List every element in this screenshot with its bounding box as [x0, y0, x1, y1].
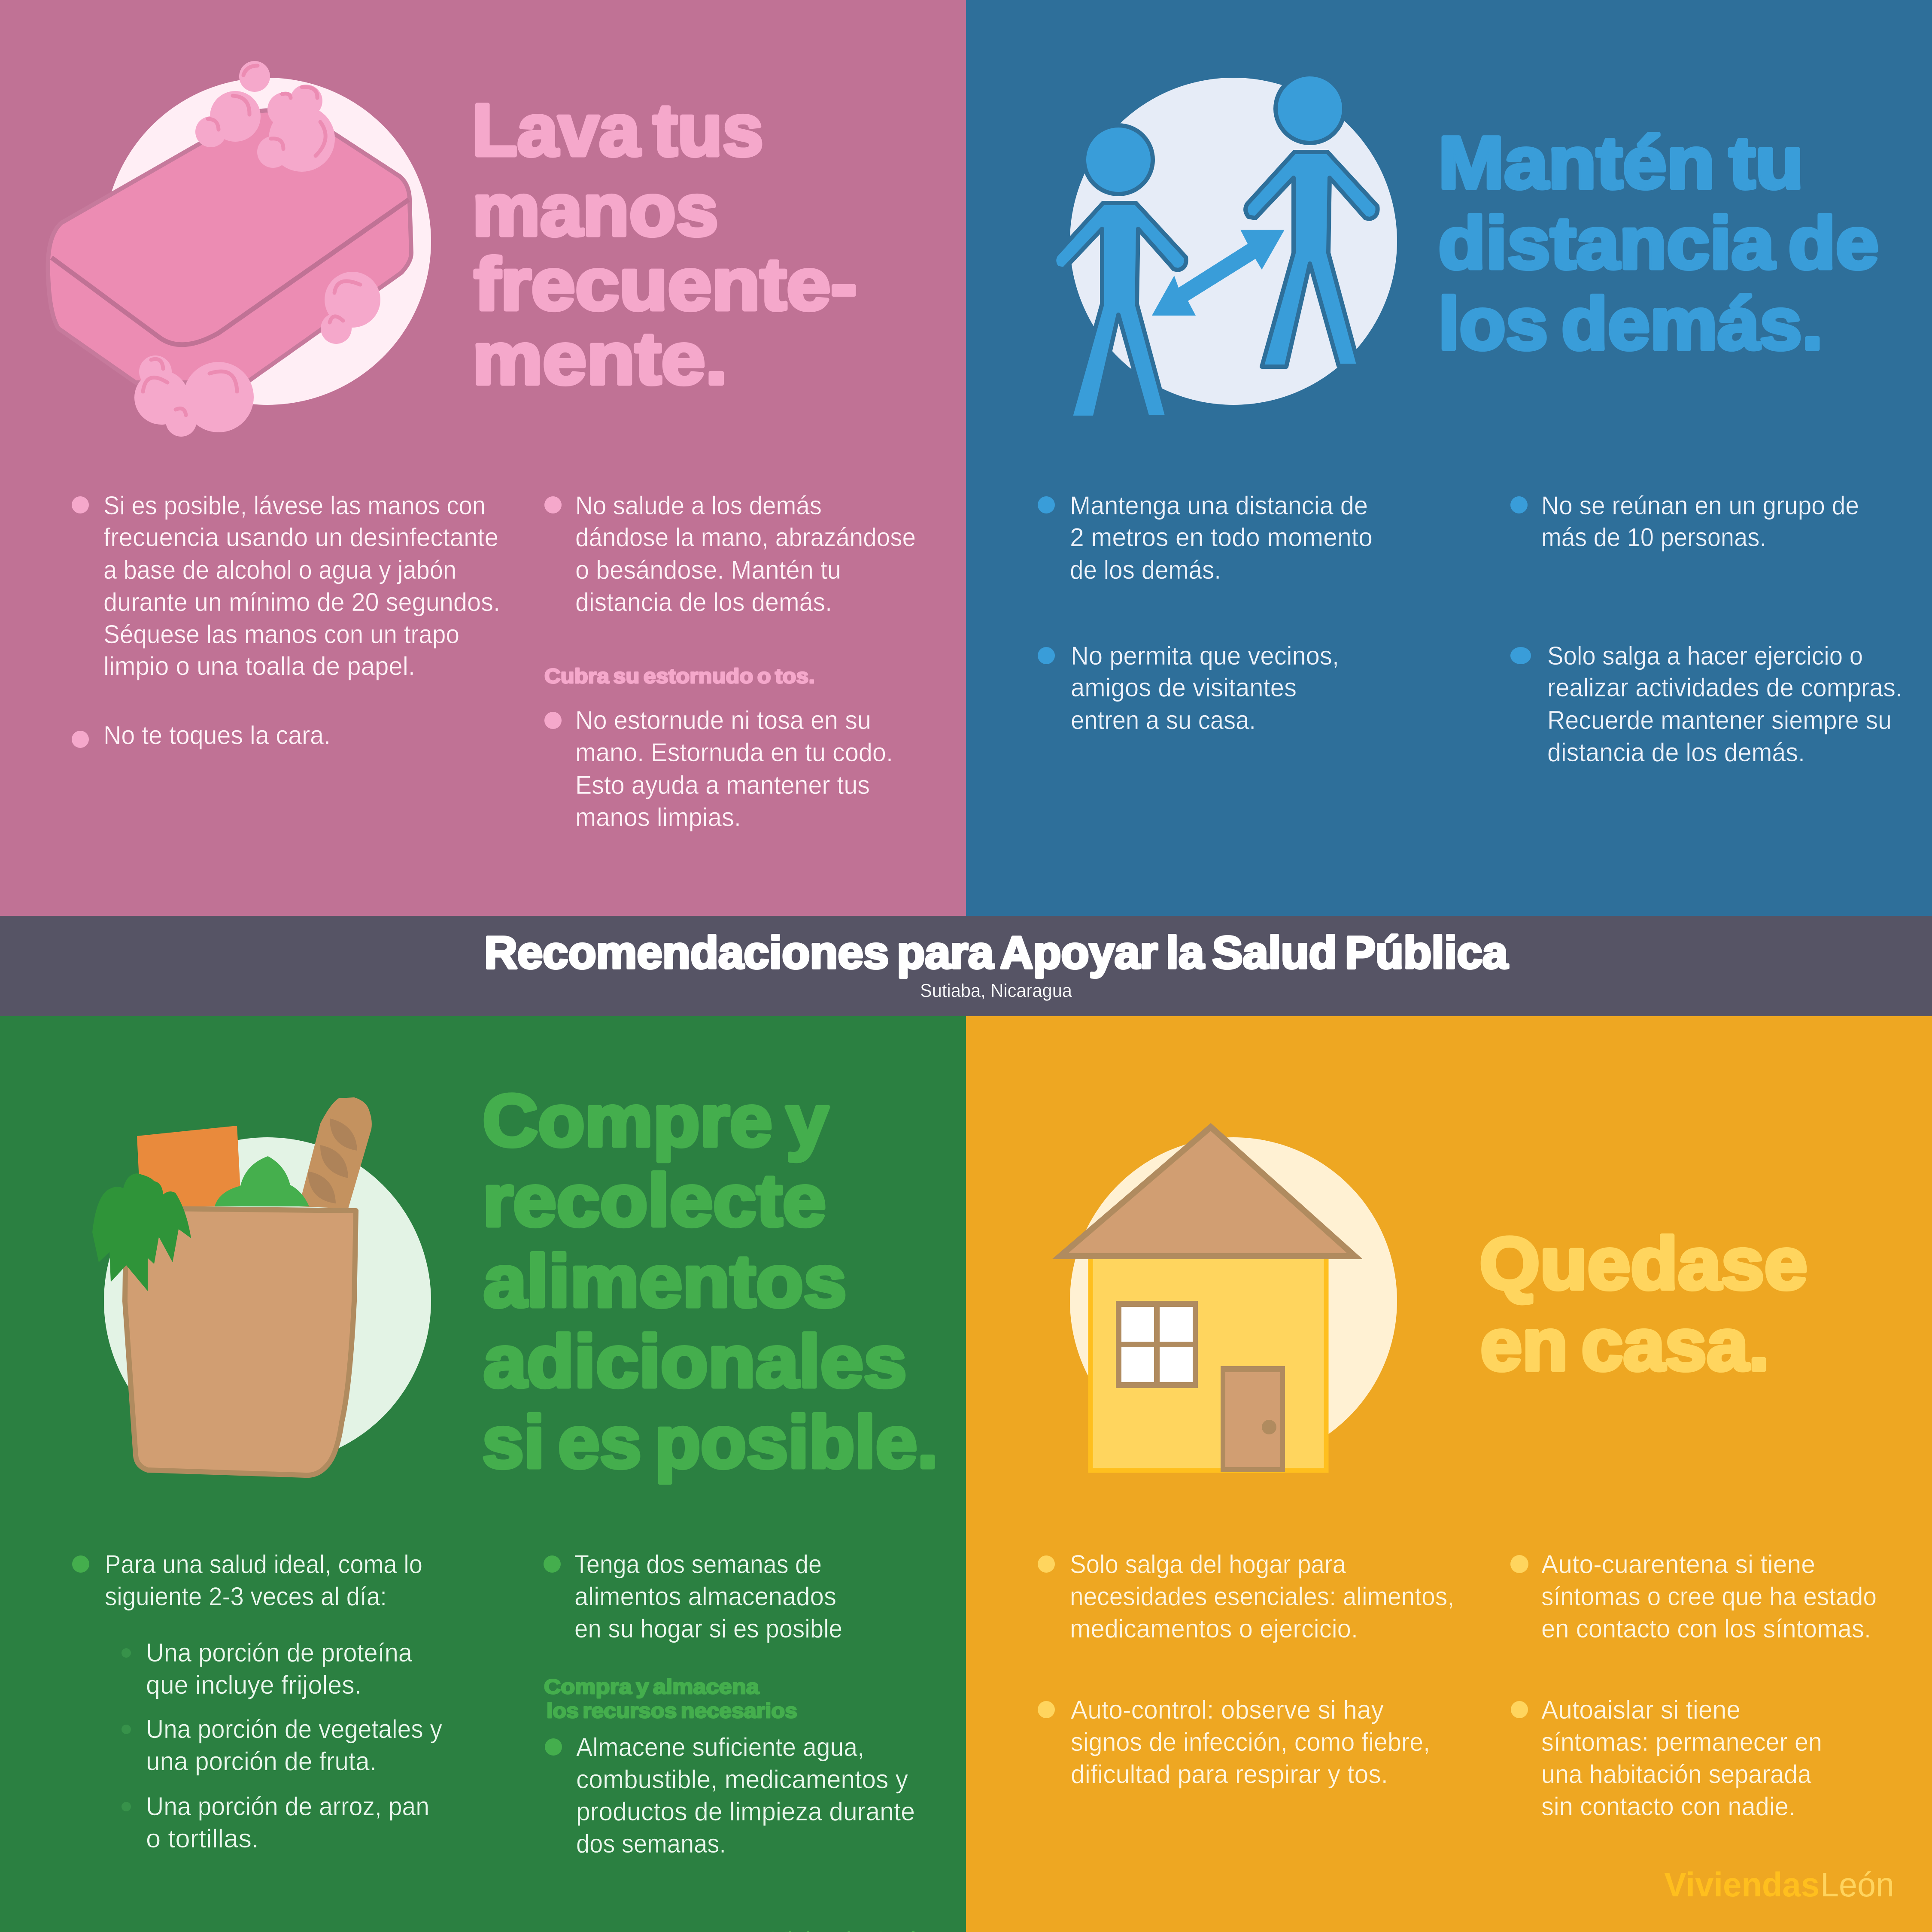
text block: right column: mano. Estornuda en tu codo.	[575, 738, 893, 767]
window	[1116, 1301, 1198, 1388]
text block: right column: dos semanas.	[576, 1829, 726, 1858]
heading: Compre y recolecte alimentos adicionales si es posible: Compre y	[483, 1079, 829, 1162]
panel: wash hands	[0, 0, 966, 916]
panel background: yellow	[966, 1016, 1932, 1932]
heading: Lava tus manos frecuentemente: Lava tus	[472, 89, 763, 171]
text block: left column	[105, 1550, 442, 1853]
text block: right column	[1541, 1550, 1877, 1821]
text block: left column: durante un mínimo de 20 segundos.	[103, 588, 500, 617]
text block: left column: Solo salga del hogar para	[1070, 1550, 1346, 1579]
text block: left column: Auto-control: observe si hay	[1071, 1695, 1384, 1724]
text block: left column: o tortillas.	[146, 1824, 259, 1853]
text block: left column: frecuencia usando un desinfectante	[103, 523, 498, 552]
baguette	[299, 1097, 372, 1209]
text block: right column: alimentos almacenados	[574, 1582, 836, 1611]
bag body	[125, 1208, 356, 1475]
text block: right column: Auto-cuarentena si tiene	[1541, 1550, 1815, 1579]
heading: Lava tus manos frecuentemente: manos	[472, 169, 718, 251]
text block: left column	[103, 491, 500, 750]
subtitle: location: Sutiaba, Nicaragua	[920, 980, 1072, 1001]
heading: Compre y recolecte alimentos adicionales si es posible: si es posible.	[482, 1401, 938, 1483]
subheading: buy and store: los recursos necesarios	[547, 1700, 797, 1722]
subheading: buy and store	[544, 1676, 797, 1722]
text block: left column: necesidades esenciales: alimentos,	[1070, 1582, 1454, 1611]
bullets: blue	[1038, 496, 1531, 664]
logo: ViviendasLeón: Viviendas	[1664, 1865, 1820, 1904]
door	[1221, 1366, 1285, 1472]
subheading: cover sneeze: Cubra su estornudo o tos.	[544, 665, 815, 688]
text block: left column: Séquese las manos con un trapo	[103, 620, 459, 649]
text block: right column: síntomas o cree que ha estado	[1541, 1582, 1877, 1611]
text block: right column: Autoaislar si tiene	[1541, 1695, 1741, 1724]
text block: left column: limpio o una toalla de papel.	[103, 652, 415, 680]
panel: buy food	[0, 1016, 966, 1932]
panel background: green	[0, 1016, 966, 1932]
heading: Compre y recolecte alimentos adicionales si es posible: alimentos	[483, 1240, 847, 1322]
text block: left column	[1070, 1550, 1454, 1789]
text block: left column: que incluye frijoles.	[146, 1671, 361, 1699]
text block: right column: Recuerde mantener siempre su	[1547, 706, 1892, 735]
text block: right column: sin contacto con nadie.	[1541, 1792, 1795, 1821]
text block: left column: medicamentos o ejercicio.	[1070, 1614, 1358, 1643]
bullets: yellow	[1038, 1555, 1528, 1718]
text block: right column: Esto ayuda a mantener tus	[575, 771, 870, 799]
text block: right column: Solo salga a hacer ejercicio o	[1547, 641, 1863, 670]
heading: Mantén tu distancia de los demás	[1438, 122, 1879, 365]
text block: right column: realizar actividades de compras.	[1547, 673, 1902, 702]
text block: left column	[1070, 491, 1373, 735]
heading: Compre y recolecte alimentos adicionales si es posible: adicionales	[483, 1320, 907, 1403]
text block: right column: No se reúnan en un grupo de	[1541, 491, 1859, 520]
heading: Quedase en casa	[1479, 1222, 1807, 1386]
text block: right column: No salude a los demás	[575, 491, 822, 520]
heading: Lava tus manos frecuentemente: frecuente-	[474, 243, 857, 325]
text block: right column: más de 10 personas.	[1541, 523, 1766, 552]
text block: right column: distancia de los demás.	[575, 588, 832, 617]
text block: left column: Para una salud ideal, coma lo	[105, 1550, 422, 1579]
text block: right column: dándose la mano, abrazándose	[575, 523, 916, 552]
main title: Recomendaciones para Apoyar la Salud Pública	[484, 927, 1508, 978]
sub-bullets: dark green	[122, 1648, 131, 1811]
text block: right column: Tenga dos semanas de	[574, 1550, 822, 1579]
dark leaves	[92, 1173, 191, 1291]
text block: right column: combustible, medicamentos y	[576, 1765, 908, 1794]
panel: stay home	[966, 1016, 1932, 1932]
text block: right column: manos limpias.	[575, 803, 741, 832]
panel background: pink	[0, 0, 966, 916]
text block: right column: en contacto con los síntomas.	[1541, 1614, 1871, 1643]
icon: soap bar with bubbles	[48, 61, 431, 437]
text block: right column: productos de limpieza durante	[576, 1797, 915, 1826]
text block: left column: entren a su casa.	[1071, 706, 1256, 735]
carrot-coloured box	[137, 1126, 241, 1206]
text block: left column: Mantenga una distancia de	[1070, 491, 1368, 520]
heading: Lava tus manos frecuentemente	[472, 89, 857, 400]
text block: left column: No te toques la cara.	[103, 721, 331, 750]
panel background: blue	[966, 0, 1932, 916]
subheading: buy and store: Compra y almacena	[544, 1676, 759, 1698]
text block: right column: No estornude ni tosa en su	[575, 706, 871, 735]
text block: right column: en su hogar si es posible	[574, 1614, 842, 1643]
text block: right column: Almacene suficiente agua,	[576, 1733, 864, 1762]
heading: Compre y recolecte alimentos adicionales si es posible: recolecte	[483, 1159, 826, 1242]
heading: Quedase en casa: en casa.	[1480, 1303, 1769, 1386]
icon: grocery bag	[92, 1097, 431, 1475]
heading: Quedase en casa: Quedase	[1479, 1222, 1807, 1305]
text block: right column: síntomas: permanecer en	[1541, 1728, 1822, 1756]
heading: Lava tus manos frecuentemente: mente.	[472, 317, 727, 400]
text block: right column: una habitación separada	[1541, 1760, 1812, 1789]
logo: ViviendasLeón: León	[1820, 1865, 1894, 1904]
text block: left column: No permita que vecinos,	[1071, 641, 1339, 670]
bullets: pink	[72, 496, 562, 748]
text block: left column: dificultad para respirar y tos.	[1071, 1760, 1388, 1789]
text block: left column: amigos de visitantes	[1071, 673, 1297, 702]
text block: left column: 2 metros en todo momento	[1070, 523, 1373, 552]
text block: left column: una porción de fruta.	[146, 1747, 377, 1776]
text block: left column: a base de alcohol o agua y jabón	[103, 556, 456, 584]
heading: Mantén tu distancia de los demás: Mantén tu	[1438, 122, 1804, 204]
heading: Mantén tu distancia de los demás: distancia de	[1438, 202, 1879, 284]
text block: left column: Una porción de proteína	[146, 1638, 413, 1667]
icon: house	[1060, 1127, 1397, 1472]
text block: right column	[1541, 491, 1902, 767]
text block: right column	[575, 491, 916, 832]
heading: Mantén tu distancia de los demás: los demás.	[1438, 283, 1823, 365]
panel: title band	[0, 916, 1932, 1016]
text block: left column: signos de infección, como fiebre,	[1071, 1728, 1430, 1756]
text block: right column: o besándose. Mantén tu	[575, 556, 841, 584]
band background	[0, 916, 1932, 1016]
text block: left column: Si es posible, lávese las manos con	[103, 491, 486, 520]
text block: right column	[574, 1550, 915, 1858]
text block: left column: Una porción de vegetales y	[146, 1715, 442, 1744]
icon: two people with arrow	[1054, 74, 1397, 418]
text block: left column: siguiente 2-3 veces al día:	[105, 1582, 387, 1611]
text block: right column: distancia de los demás.	[1547, 738, 1805, 767]
lettuce	[215, 1156, 309, 1206]
logo: ViviendasLeón	[1664, 1865, 1894, 1904]
text block: left column: de los demás.	[1070, 556, 1221, 584]
bullets: green	[72, 1555, 562, 1756]
panel: keep distance	[966, 0, 1932, 916]
heading: Compre y recolecte alimentos adicionales si es posible	[482, 1079, 938, 1483]
text block: left column: Una porción de arroz, pan	[146, 1792, 429, 1821]
